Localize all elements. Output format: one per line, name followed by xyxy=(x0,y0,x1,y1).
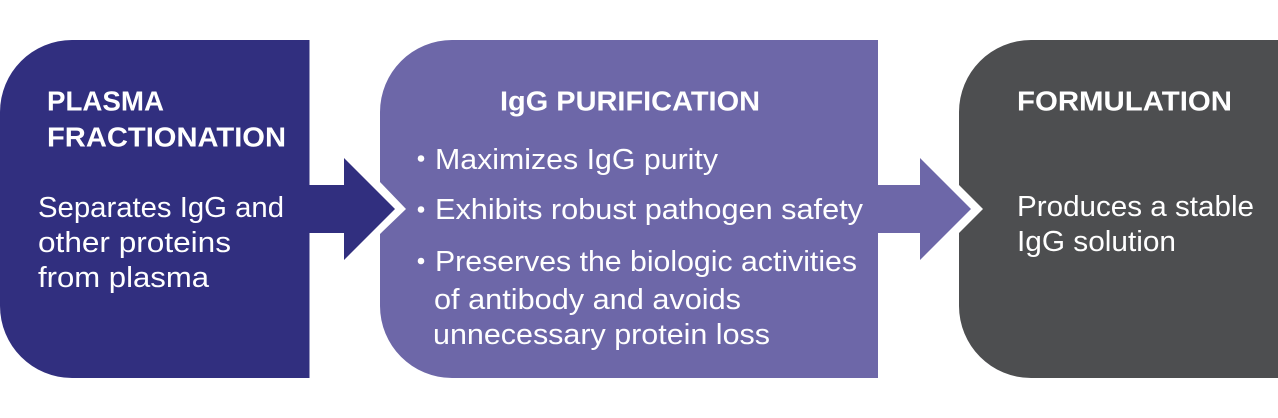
heading: plasma fractionation: FRACTIONATION xyxy=(47,122,286,152)
panel: IgG purification xyxy=(380,40,878,378)
text: plasma fractionation description xyxy=(38,192,284,294)
text: plasma fractionation description: from plasma xyxy=(38,262,209,294)
heading: plasma fractionation xyxy=(47,86,286,152)
heading: plasma fractionation: PLASMA xyxy=(47,86,164,116)
heading: IgG purification: IgG PURIFICATION xyxy=(500,86,760,116)
text: formulation description xyxy=(1017,191,1254,258)
bullet: preserves biologic activities: unnecessary protein loss xyxy=(433,319,770,351)
bullet: preserves biologic activities xyxy=(418,246,857,351)
heading: formulation: FORMULATION xyxy=(1017,86,1232,116)
text: plasma fractionation description: Separates IgG and xyxy=(38,192,284,224)
bullet: preserves biologic activities: Preserves the biologic activities xyxy=(435,246,857,278)
bullet: maximizes IgG purity: Maximizes IgG purity xyxy=(435,144,719,176)
panel: plasma fractionation xyxy=(0,40,310,378)
bullet: preserves biologic activities: of antibody and avoids xyxy=(434,284,741,316)
panel: formulation xyxy=(959,40,1278,378)
text: formulation description: IgG solution xyxy=(1017,226,1176,258)
arrow: purification to formulation xyxy=(877,158,971,260)
arrow: fractionation to purification xyxy=(309,158,395,260)
text: plasma fractionation description: other proteins xyxy=(38,227,231,259)
text: formulation description: Produces a stable xyxy=(1017,191,1254,223)
bullet: pathogen safety: Exhibits robust pathogen safety xyxy=(435,194,864,226)
